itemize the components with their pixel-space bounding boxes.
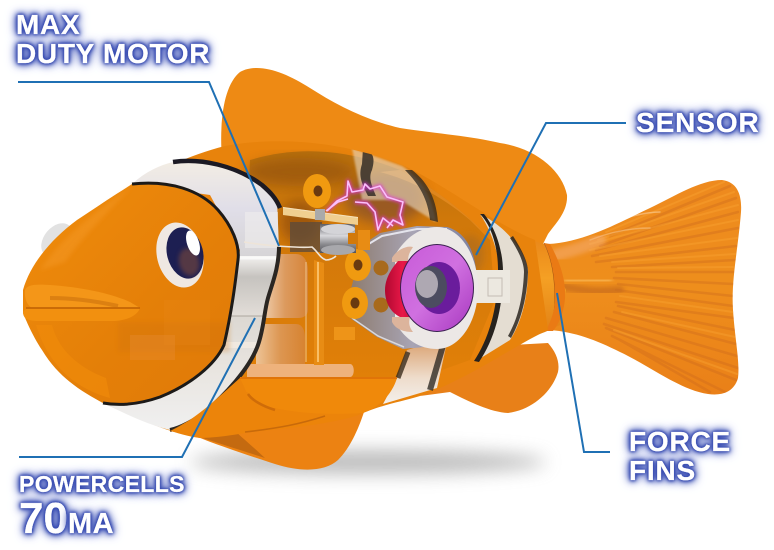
lower belly panel — [170, 378, 397, 438]
label: max duty motor: MAX — [16, 9, 80, 40]
clownfish illustration — [18, 68, 742, 484]
label: force fins: FORCE — [629, 426, 731, 457]
white body band — [103, 161, 280, 430]
interior cavity — [240, 148, 528, 404]
eye — [150, 217, 210, 293]
tail collar — [510, 234, 566, 345]
label: max duty motor — [8, 6, 216, 72]
body shell — [24, 141, 548, 438]
capacity value: 70MA — [19, 494, 114, 543]
label: force fins: FINS — [629, 454, 696, 486]
callout line: sensor — [476, 123, 626, 255]
ventral fin — [195, 400, 364, 470]
electric spark — [326, 181, 403, 230]
gyro capsule — [348, 226, 477, 349]
label: force fins — [622, 422, 737, 490]
rear lower fin — [420, 343, 559, 413]
powercell battery packs — [247, 254, 354, 377]
motor shaft — [476, 270, 510, 303]
second black stripe — [170, 161, 280, 430]
powercells text: POWERCELLS — [19, 471, 185, 497]
orange head — [23, 183, 238, 404]
callout line: force fins — [557, 293, 610, 452]
ground shadow — [190, 450, 546, 474]
label: max duty motor: DUTY MOTOR — [16, 38, 210, 69]
orange washers — [303, 174, 371, 340]
magenta ring assembly — [385, 227, 478, 349]
tail fin — [548, 180, 741, 394]
callout line: motor — [18, 82, 279, 246]
motor and circuit board — [244, 207, 370, 260]
grey bump behind head — [35, 217, 79, 263]
dorsal fin — [221, 68, 567, 250]
label: powercells 70ma — [11, 466, 192, 543]
callout line: powercells — [19, 318, 255, 457]
label: sensor: SENSOR — [636, 107, 760, 138]
rear body stripes — [352, 148, 528, 404]
lips — [23, 285, 140, 321]
